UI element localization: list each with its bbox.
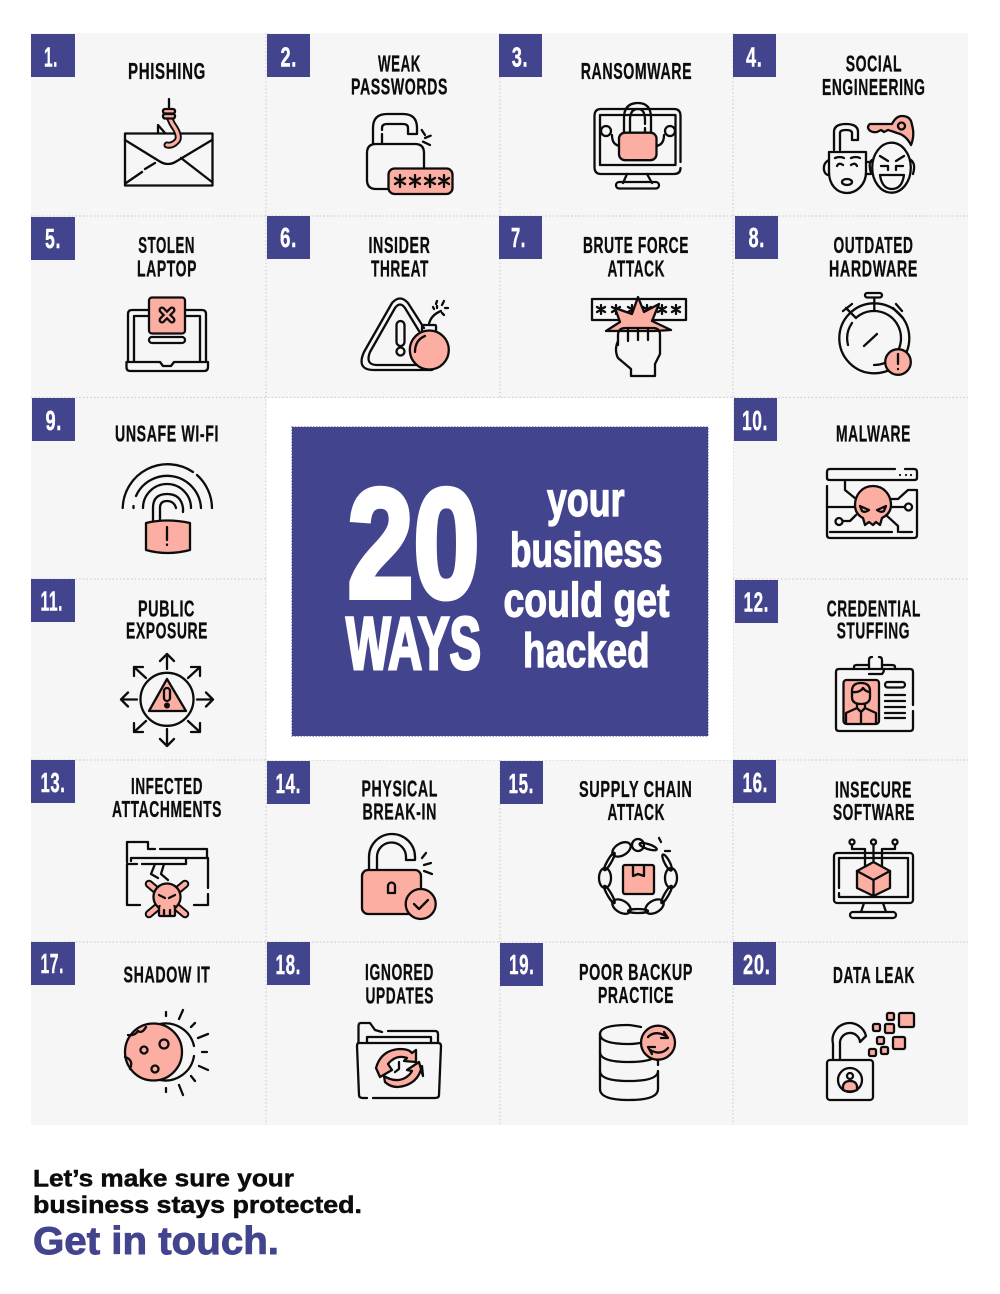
number badge 15: 15. xyxy=(508,768,534,799)
label: supply chain attack: SUPPLY CHAIN xyxy=(579,776,692,802)
label: public exposure xyxy=(126,596,208,644)
number badge 3 xyxy=(499,34,542,77)
icon: monitor with cube xyxy=(834,840,913,918)
number badge 11: 11. xyxy=(40,586,63,617)
number badge 18: 18. xyxy=(276,949,301,980)
label: data leak: DATA LEAK xyxy=(833,962,915,988)
panel: 18 ignored updates xyxy=(267,942,441,1098)
heading: 20 ways: 20 xyxy=(348,457,480,630)
label: outdated hardware: OUTDATED xyxy=(834,232,914,258)
number badge 1: 1. xyxy=(44,42,58,72)
icon: folder with refresh arrows xyxy=(357,1023,441,1098)
label: insider threat xyxy=(368,232,430,282)
label: ignored updates: IGNORED xyxy=(365,959,434,985)
label: insecure software: INSECURE xyxy=(835,776,912,802)
label: ignored updates xyxy=(365,959,434,1008)
panel: 14 physical break-in xyxy=(267,761,438,919)
text block: call to action: Let’s make sure your xyxy=(33,1166,294,1193)
number badge 5: 5. xyxy=(45,223,61,254)
label: physical break-in xyxy=(362,776,438,825)
heading: your business could get hacked: your xyxy=(547,474,624,527)
panel: 7 brute force attack xyxy=(499,216,689,376)
label: poor backup practice: POOR BACKUP xyxy=(579,959,693,985)
label: physical break-in: PHYSICAL xyxy=(362,776,438,802)
panel: center title xyxy=(292,427,708,736)
number badge 8: 8. xyxy=(748,222,765,253)
number badge 10 xyxy=(734,398,777,441)
number badge 16 xyxy=(733,760,776,803)
label: stolen laptop: STOLEN xyxy=(138,232,195,258)
number badge 2: 2. xyxy=(280,42,297,72)
link text: get in touch: Get in touch. xyxy=(33,1220,279,1263)
number badge 12 xyxy=(735,580,778,623)
label: social engineering: ENGINEERING xyxy=(822,74,926,100)
number badge 10: 10. xyxy=(742,405,768,436)
panel: 20 data leak xyxy=(733,942,915,1100)
label: credential stuffing: CREDENTIAL xyxy=(827,596,921,622)
icon: hook in envelope xyxy=(125,99,212,186)
panel: 2 weak passwords xyxy=(267,34,452,194)
label: stolen laptop: LAPTOP xyxy=(137,256,197,282)
icon: box inside broken chain xyxy=(599,838,677,917)
label: brute force attack: BRUTE FORCE xyxy=(583,232,689,258)
number badge 19: 19. xyxy=(509,949,534,980)
icon: locked monitor xyxy=(594,103,680,188)
label: infected attachments xyxy=(112,773,222,822)
panel: 5 stolen laptop xyxy=(31,217,208,371)
panel: 1 phishing xyxy=(31,34,212,186)
icon: browser window with skull xyxy=(827,469,917,538)
number badge 9 xyxy=(32,398,75,441)
number badge 20: 20. xyxy=(743,949,770,980)
label: weak passwords xyxy=(351,51,448,100)
text block: call to action: business stays protected. xyxy=(33,1192,362,1219)
label: outdated hardware: HARDWARE xyxy=(829,256,918,282)
number badge 6: 6. xyxy=(280,222,297,253)
number badge 12: 12. xyxy=(744,586,769,617)
icon: hand striking password bar xyxy=(592,297,686,376)
number badge 11 xyxy=(31,579,75,622)
panel: 10 malware xyxy=(734,398,917,538)
number badge 8 xyxy=(735,216,778,259)
label: public exposure: PUBLIC xyxy=(138,596,195,622)
label: infected attachments: INFECTED xyxy=(131,773,203,799)
label: brute force attack xyxy=(583,232,689,282)
icon: open lock with leaking data xyxy=(827,1013,914,1100)
label: weak passwords: PASSWORDS xyxy=(351,74,448,100)
number badge 18 xyxy=(267,942,310,985)
label: infected attachments: ATTACHMENTS xyxy=(112,796,222,822)
panel: 13 infected attachments xyxy=(31,760,222,916)
label: insecure software: SOFTWARE xyxy=(833,799,915,825)
number badge 3: 3. xyxy=(512,42,528,72)
number badge 6 xyxy=(267,216,310,259)
panel: 16 insecure software xyxy=(733,760,915,918)
number badge 13 xyxy=(31,760,75,803)
label: credential stuffing xyxy=(827,596,921,644)
heading: 20 ways: WAYS xyxy=(346,602,481,685)
panel: 8 outdated hardware xyxy=(735,216,918,375)
heading: 20 ways xyxy=(346,457,481,685)
label: social engineering xyxy=(822,51,926,100)
icon: id badge xyxy=(836,657,913,731)
number badge 17: 17. xyxy=(40,948,64,979)
label: supply chain attack xyxy=(579,776,692,825)
number badge 19 xyxy=(500,943,543,986)
heading: your business could get hacked xyxy=(504,474,670,678)
label: supply chain attack: ATTACK xyxy=(608,799,665,825)
label: insecure software xyxy=(833,776,915,825)
label: phishing: PHISHING xyxy=(128,58,206,84)
number badge 5 xyxy=(31,217,75,260)
label: brute force attack: ATTACK xyxy=(608,256,665,282)
label: physical break-in: BREAK-IN xyxy=(362,799,437,825)
number badge 14: 14. xyxy=(276,768,301,799)
number badge 1 xyxy=(31,34,75,77)
panel: 12 credential stuffing xyxy=(735,580,921,731)
icon: open padlock with password xyxy=(367,114,452,194)
label: malware: MALWARE xyxy=(836,421,911,447)
label: credential stuffing: STUFFING xyxy=(837,618,910,644)
label: shadow it: SHADOW IT xyxy=(124,962,210,988)
label: ransomware: RANSOMWARE xyxy=(581,58,692,84)
heading: your business could get hacked: hacked xyxy=(523,625,650,678)
number badge 16: 16. xyxy=(742,767,768,798)
panel: 9 unsafe wi-fi xyxy=(32,398,219,553)
number badge 13: 13. xyxy=(40,767,66,798)
icon: open padlock with check xyxy=(362,834,436,919)
number badge 4 xyxy=(733,34,776,77)
panel: 6 insider threat xyxy=(267,216,449,370)
label: unsafe wi-fi: UNSAFE WI-FI xyxy=(115,421,219,447)
number badge 17 xyxy=(31,942,75,985)
label: stolen laptop xyxy=(137,232,197,282)
number badge 9: 9. xyxy=(46,405,62,436)
number badge 2 xyxy=(267,34,310,77)
panel: cell grid background xyxy=(31,33,968,1125)
icon: database with sync badge xyxy=(600,1025,675,1100)
label: insider threat: INSIDER xyxy=(368,232,430,258)
panel: 17 shadow it xyxy=(31,942,210,1095)
icon: wi-fi arcs and padlock xyxy=(123,464,212,553)
label: poor backup practice: PRACTICE xyxy=(598,982,674,1008)
panel: 19 poor backup practice xyxy=(500,943,693,1100)
number badge 4: 4. xyxy=(746,42,762,72)
icon: eclipse xyxy=(125,1010,208,1095)
number badge 15 xyxy=(500,761,543,804)
panel: 4 social engineering xyxy=(733,34,926,193)
icon: alert with radiating arrows xyxy=(121,654,213,746)
number badge 14 xyxy=(267,761,310,804)
heading: your business could get hacked: could get xyxy=(504,575,670,628)
label: insider threat: THREAT xyxy=(371,256,429,282)
panel: 3 ransomware xyxy=(499,34,692,188)
icon: two masks and key xyxy=(824,116,914,193)
icon: laptop with error document xyxy=(126,298,208,371)
icon: folder with skull xyxy=(127,842,208,916)
label: poor backup practice xyxy=(579,959,693,1008)
label: weak passwords: WEAK xyxy=(378,51,421,77)
panel: 15 supply chain attack xyxy=(500,761,692,917)
label: ignored updates: UPDATES xyxy=(366,982,434,1008)
text block: call to action xyxy=(33,1166,362,1263)
label: public exposure: EXPOSURE xyxy=(126,618,208,644)
icon: stopwatch with alert xyxy=(839,293,911,375)
panel: 11 public exposure xyxy=(31,579,213,746)
number badge 20 xyxy=(733,942,776,985)
icon: warning triangle with bomb xyxy=(362,298,449,370)
number badge 7: 7. xyxy=(511,222,526,253)
label: outdated hardware xyxy=(829,232,918,282)
number badge 7 xyxy=(499,216,542,259)
heading: your business could get hacked: business xyxy=(510,525,662,578)
label: social engineering: SOCIAL xyxy=(846,51,902,77)
